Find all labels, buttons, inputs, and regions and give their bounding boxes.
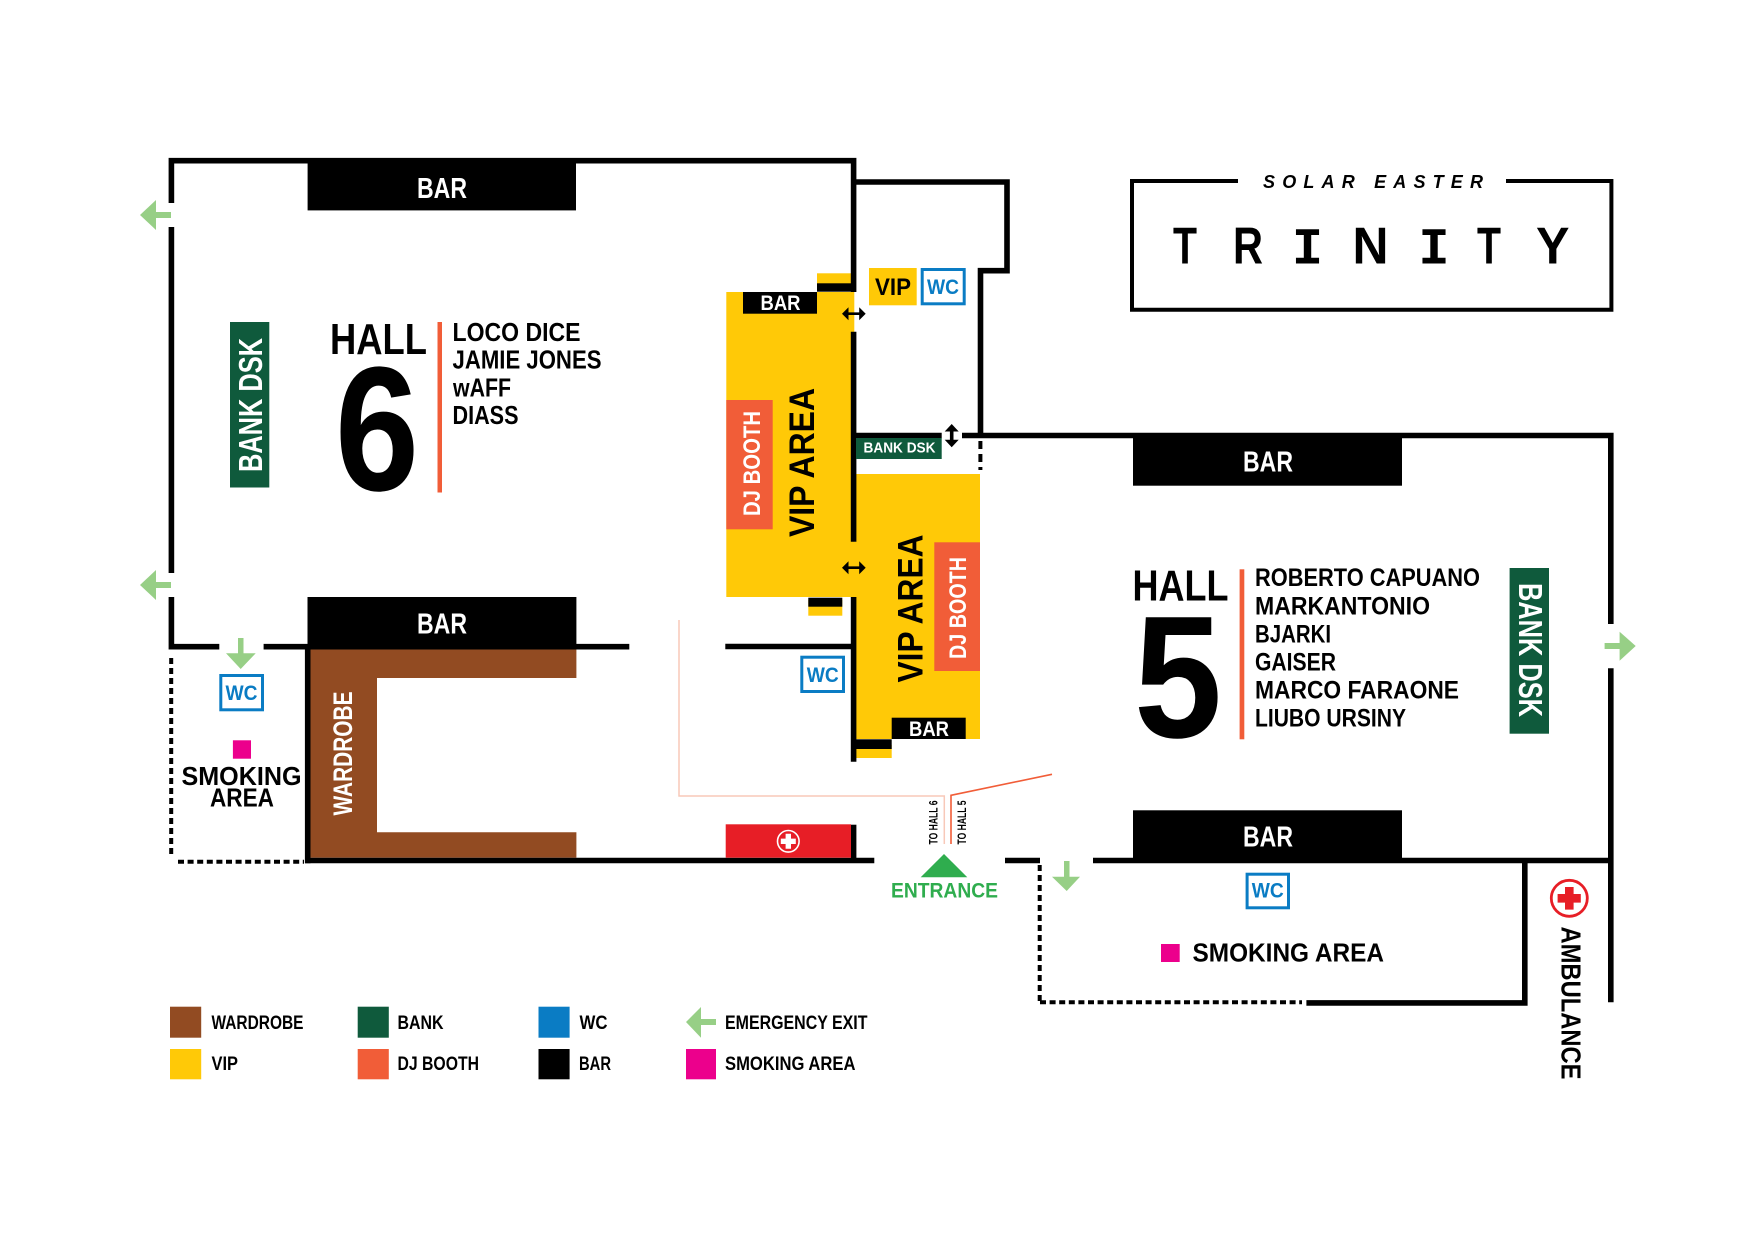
title: Solar Easter Trinity logo — [1132, 172, 1611, 310]
text block: hall 5 artists: LIUBO URSINY — [1255, 704, 1406, 732]
bar: hall 6 top — [308, 160, 576, 210]
bar: hall 6 bottom: BAR — [417, 608, 467, 640]
text block: hall 6 artists: wAFF — [452, 372, 511, 402]
bar: VIP hall 5: BAR — [909, 718, 949, 741]
icon: WC left smoking area: WC — [226, 681, 258, 705]
legend item: bar: BAR — [579, 1054, 611, 1075]
legend item: WC — [538, 1007, 608, 1038]
divider: hall 6 — [438, 322, 442, 492]
legend item: smoking area — [686, 1049, 856, 1079]
bank desk: hall 5: BANK DSK — [1512, 583, 1549, 717]
bank desk: hall 6: BANK DSK — [232, 338, 269, 472]
panel: brown wardrobe zone — [310, 649, 576, 858]
legend item: wardrobe: WARDROBE — [212, 1013, 304, 1034]
bar: hall 6 bottom — [308, 597, 576, 649]
title: Solar Easter Trinity logo: T — [1173, 217, 1197, 275]
text block: hall 6 artists: JAMIE JONES — [452, 344, 602, 374]
title: Solar Easter Trinity logo: SOLAR EASTER — [1263, 172, 1483, 192]
text block: hall 5 artists — [1255, 564, 1480, 732]
arrow: emergency exit right — [1605, 632, 1636, 661]
panel: hall walls — [171, 161, 1613, 1003]
DJ booth: hall 5 — [934, 542, 980, 671]
label: to hall 5: TO HALL 5 — [956, 800, 969, 844]
legend item: DJ booth — [358, 1049, 479, 1079]
DJ booth: hall 6 — [726, 400, 773, 529]
icon: WC VIP — [922, 270, 964, 304]
text block: hall 5 artists: MARCO FARAONE — [1255, 676, 1459, 704]
legend item: VIP — [170, 1049, 238, 1079]
title: Solar Easter Trinity logo: I — [1292, 220, 1323, 279]
arrow: door corridor — [945, 424, 959, 447]
heading: hall 6: HALL — [330, 316, 427, 364]
smoking area: left — [182, 740, 302, 813]
icon: WC left smoking area — [221, 676, 262, 710]
icon: WC hall 6: WC — [807, 663, 839, 687]
entrance — [891, 854, 998, 903]
text block: hall 5 artists: MARKANTONIO — [1255, 592, 1430, 620]
heading: hall 6: 6 — [335, 330, 419, 528]
bank desk: corridor: BANK DSK — [864, 440, 936, 457]
legend item: DJ booth: DJ BOOTH — [398, 1054, 479, 1075]
bar: hall 6 top: BAR — [417, 173, 467, 205]
legend item: VIP: VIP — [212, 1054, 238, 1075]
arrow: emergency exit lower left — [140, 570, 171, 600]
bar: hall 5 bottom: BAR — [1243, 822, 1293, 854]
arrow: door upper VIP — [842, 307, 866, 320]
label: VIP area hall 5: VIP AREA — [892, 534, 931, 682]
icon: WC right smoking area: WC — [1252, 879, 1284, 903]
text block: hall 5 artists: GAISER — [1255, 648, 1336, 676]
bar: VIP hall 6: BAR — [760, 292, 800, 315]
ambulance — [1551, 880, 1587, 1080]
entrance: ENTRANCE — [891, 880, 998, 903]
heading: hall 5: HALL — [1132, 563, 1228, 611]
ambulance: AMBULANCE — [1556, 926, 1587, 1080]
DJ booth: hall 6: DJ BOOTH — [739, 411, 766, 516]
arrow: door lower VIP — [842, 561, 866, 574]
text block: hall 6 artists: DIASS — [452, 400, 518, 430]
arrow: exit down to left smoking area — [226, 638, 256, 669]
smoking area: right: SMOKING AREA — [1192, 940, 1384, 968]
title: Solar Easter Trinity logo: R — [1233, 217, 1263, 275]
first aid room — [726, 824, 851, 858]
bar: VIP hall 6 — [743, 283, 856, 315]
text block: hall 6 artists: LOCO DICE — [452, 317, 580, 347]
divider: hall 5 — [1240, 569, 1244, 739]
legend item: bank: BANK — [398, 1013, 444, 1034]
heading: hall 5: 5 — [1134, 579, 1222, 774]
arrow: exit down to right smoking area — [1052, 861, 1080, 891]
legend item: bar — [538, 1049, 611, 1079]
label: VIP tag — [869, 268, 917, 305]
title: Solar Easter Trinity logo: Y — [1536, 217, 1570, 275]
smoking area: left: AREA — [210, 785, 274, 813]
label: VIP tag: VIP — [875, 274, 911, 301]
text block: hall 5 artists: BJARKI — [1255, 621, 1331, 649]
legend item: emergency exit: EMERGENCY EXIT — [725, 1013, 868, 1034]
smoking area: left: SMOKING — [182, 763, 302, 791]
icon: WC hall 6 — [802, 657, 844, 692]
icon: WC VIP: WC — [927, 275, 959, 299]
title: Solar Easter Trinity logo: I — [1418, 220, 1450, 279]
text block: hall 5 artists: ROBERTO CAPUANO — [1255, 564, 1480, 592]
legend item: WC: WC — [580, 1013, 608, 1034]
bar: hall 5 bottom — [1133, 810, 1402, 860]
text block: hall 6 artists — [452, 317, 602, 430]
icon: WC right smoking area — [1247, 874, 1288, 908]
title: Solar Easter Trinity logo: N — [1352, 217, 1388, 275]
bar: hall 5 top: BAR — [1243, 447, 1293, 479]
legend item: emergency exit — [686, 1007, 868, 1038]
legend — [170, 1007, 868, 1079]
arrow: emergency exit upper left — [140, 200, 171, 230]
title: Solar Easter Trinity logo: T — [1477, 217, 1501, 275]
bar: hall 5 top — [1133, 435, 1402, 486]
legend item: smoking area: SMOKING AREA — [725, 1054, 856, 1075]
legend item: wardrobe — [170, 1007, 304, 1038]
legend item: bank — [358, 1007, 444, 1038]
bar: VIP hall 6 lower counter — [808, 598, 842, 607]
label: VIP area hall 6: VIP AREA — [783, 388, 822, 537]
bar: VIP hall 5 — [856, 718, 966, 749]
panel: route lines to halls — [679, 620, 1052, 844]
label: wardrobe: WARDROBE — [328, 692, 358, 816]
DJ booth: hall 5: DJ BOOTH — [945, 557, 972, 659]
panel: yellow VIP zones — [726, 273, 980, 758]
label: to hall 6: TO HALL 6 — [927, 800, 940, 844]
